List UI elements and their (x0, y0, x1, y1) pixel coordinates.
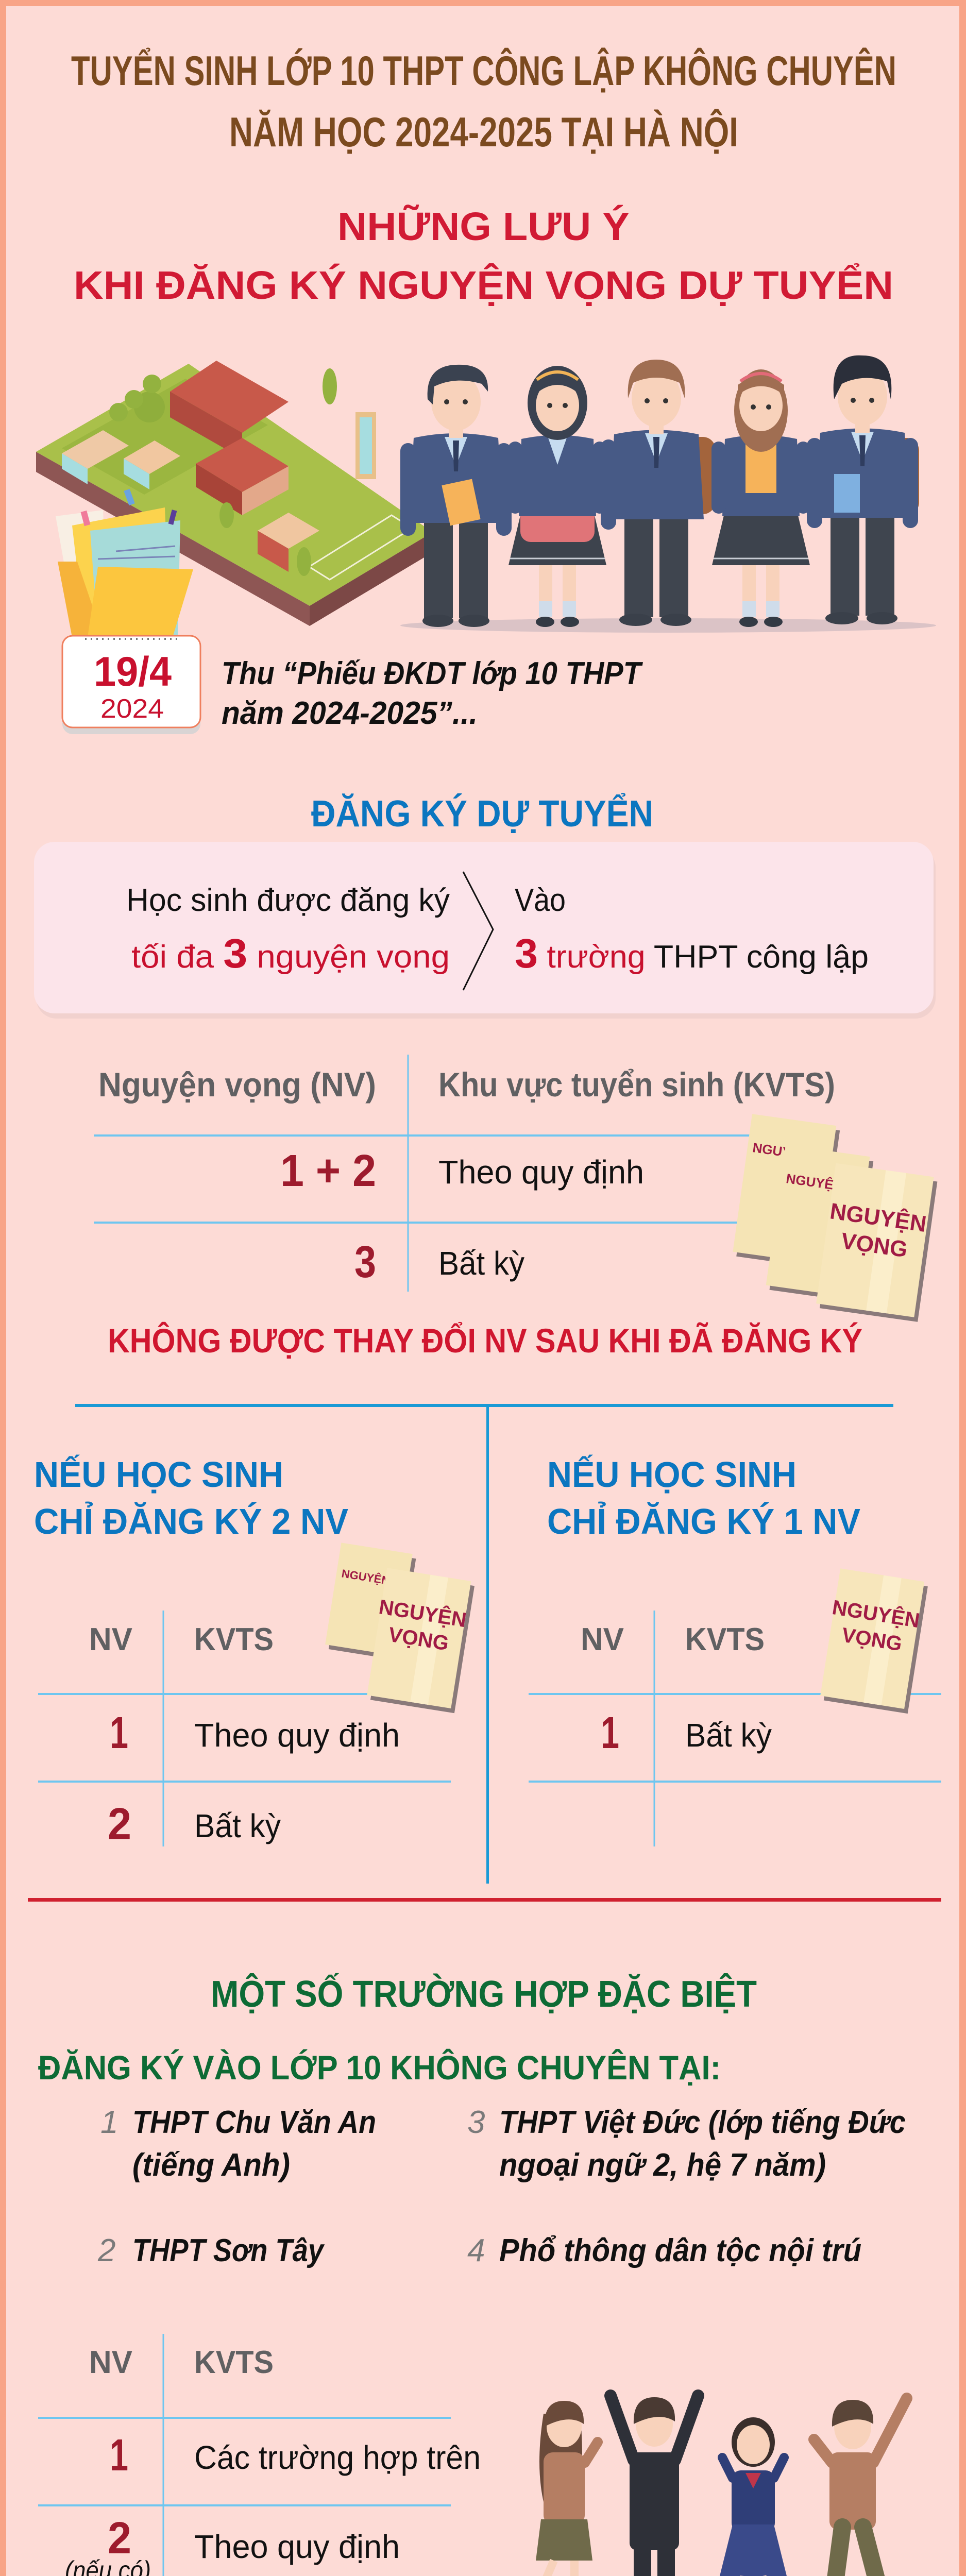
calendar: 19/4 2024 (62, 636, 200, 734)
text: Thu phieu DKDT: Thu “Phiếu ĐKDT lớp 10 THPT (222, 656, 643, 691)
list: special schools: THPT Việt Đức (lớp tiếng Đức (499, 2105, 906, 2140)
illustration: campus (36, 361, 433, 626)
panel: 2 NV: Theo quy định (194, 1717, 400, 1754)
student 4 (711, 369, 810, 627)
panel: 2 NV: CHỈ ĐĂNG KÝ 2 NV (34, 1501, 348, 1541)
list: special schools: 3 (467, 2105, 485, 2140)
heading: dang ky du tuyen: ĐĂNG KÝ DỰ TUYỂN (311, 793, 653, 835)
panel: registration summary (34, 842, 936, 1019)
kid 4 (814, 2398, 907, 2576)
table: main NV/KVTS: Theo quy định (438, 1154, 644, 1191)
table: main NV/KVTS: Khu vực tuyển sinh (KVTS) (438, 1065, 835, 1104)
panel: 2 NV: NV (89, 1622, 132, 1657)
panel: 1 NV: CHỈ ĐĂNG KÝ 1 NV (547, 1501, 860, 1541)
table: special cases: KVTS (194, 2345, 274, 2380)
panel: 1 NV: KVTS (685, 1622, 765, 1657)
panel: 1 NV: NẾU HỌC SINH (547, 1454, 796, 1495)
panel: 2 NV: 2 (108, 1799, 131, 1849)
table: special cases: Các trường hợp trên (194, 2439, 481, 2476)
kid 1 (536, 2401, 598, 2576)
subtitle: NHỮNG LƯU Ý (337, 204, 630, 249)
subheading: dang ky vao lop 10 khong chuyen: ĐĂNG KÝ VÀO LỚP 10 KHÔNG CHUYÊN TẠI: (38, 2048, 721, 2087)
table: special cases: NV (89, 2345, 132, 2380)
warning: khong duoc thay doi: KHÔNG ĐƯỢC THAY ĐỔI NV SAU KHI ĐÃ ĐĂNG KÝ (108, 1321, 862, 1360)
panel: registration summary: 3 trường THPT công lập (515, 930, 869, 976)
illustration: folders (56, 489, 193, 637)
panel: 2 NV: 1 (110, 1708, 128, 1758)
icon: nguyen vong papers (3): NGUYỆN (785, 1171, 844, 1194)
table: main NV/KVTS: Nguyện vọng (NV) (98, 1065, 376, 1104)
list: special schools: THPT Sơn Tây (132, 2233, 325, 2268)
table: special cases: 1 (110, 2430, 128, 2480)
icon: papers (2): NGUYỆN (377, 1595, 468, 1632)
title: NĂM HỌC 2024-2025 TẠI HÀ NỘI (229, 109, 738, 156)
icon: papers (2): NGUYỆN (341, 1567, 391, 1587)
table: main NV/KVTS: 3 (354, 1237, 376, 1287)
panel: 1 NV: Bất kỳ (685, 1717, 772, 1754)
text: Thu phieu DKDT: năm 2024-2025”... (222, 696, 478, 731)
icon: paper (1): VỌNG (840, 1624, 904, 1655)
panel: 1 NV: NV (581, 1622, 624, 1657)
panel: 2 NV (34, 1454, 475, 1849)
illustration: students (400, 355, 936, 633)
list: special schools: 1 (100, 2105, 118, 2140)
list: special schools: (tiếng Anh) (132, 2147, 290, 2183)
icon: nguyen vong papers (3): NGUY (752, 1140, 792, 1160)
table: main NV/KVTS (94, 1055, 835, 1292)
list: special schools: Phổ thông dân tộc nội trú (499, 2233, 861, 2268)
table: main NV/KVTS: 1 + 2 (280, 1146, 376, 1196)
kid 2 (611, 2396, 698, 2576)
student 2 (508, 366, 607, 627)
icon: paper (1): NGUYỆN (831, 1595, 921, 1632)
icon: nguyen vong papers (3) (732, 1114, 938, 1322)
table: special cases: 2 (108, 2513, 131, 2563)
heading: mot so truong hop dac biet: MỘT SỐ TRƯỜNG HỢP ĐẶC BIỆT (211, 1973, 757, 2015)
icon: papers (2): VỌNG (387, 1623, 450, 1655)
panel: 1 NV (529, 1454, 941, 1846)
panel: 1 NV: 1 (601, 1708, 619, 1758)
student 3 (601, 360, 716, 626)
list: special schools: ngoại ngữ 2, hệ 7 năm) (499, 2147, 826, 2183)
icon: papers (2) (325, 1543, 475, 1713)
list: special schools: THPT Chu Văn An (132, 2105, 376, 2140)
arrow: chevron (463, 872, 493, 990)
panel: registration summary: Vào (515, 883, 566, 918)
student 1 (400, 365, 512, 627)
table: special cases: Theo quy định (194, 2528, 400, 2565)
text: Thu phieu DKDT (222, 656, 643, 731)
icon: nguyen vong papers (3): VỌNG (839, 1228, 909, 1262)
list: special schools: 4 (467, 2233, 485, 2268)
table: special cases (38, 2334, 481, 2576)
title (71, 47, 896, 156)
divider (75, 1404, 893, 1884)
panel: 2 NV: NẾU HỌC SINH (34, 1454, 283, 1495)
divider red (28, 1898, 941, 1902)
panel: registration summary: tối đa 3 nguyện vọng (131, 930, 450, 976)
calendar: 19/4 2024: 2024 (100, 694, 164, 724)
list: special schools (97, 2105, 906, 2268)
icon: paper (1) (818, 1568, 928, 1714)
student 5 (807, 355, 919, 624)
list: special schools: 2 (97, 2233, 115, 2268)
illustration: jumping students (536, 2396, 907, 2576)
panel: 2 NV: Bất kỳ (194, 1807, 281, 1844)
panel: 2 NV: KVTS (194, 1622, 274, 1657)
panel: registration summary: Học sinh được đăng ký (126, 883, 450, 918)
calendar: 19/4 2024: 19/4 (94, 649, 172, 695)
subtitle: KHI ĐĂNG KÝ NGUYỆN VỌNG DỰ TUYỂN (74, 263, 893, 308)
table: main NV/KVTS: Bất kỳ (438, 1245, 524, 1282)
icon: nguyen vong papers (3): NGUYỆN (828, 1198, 928, 1237)
subtitle (74, 204, 893, 308)
kid 3 (720, 2417, 787, 2576)
